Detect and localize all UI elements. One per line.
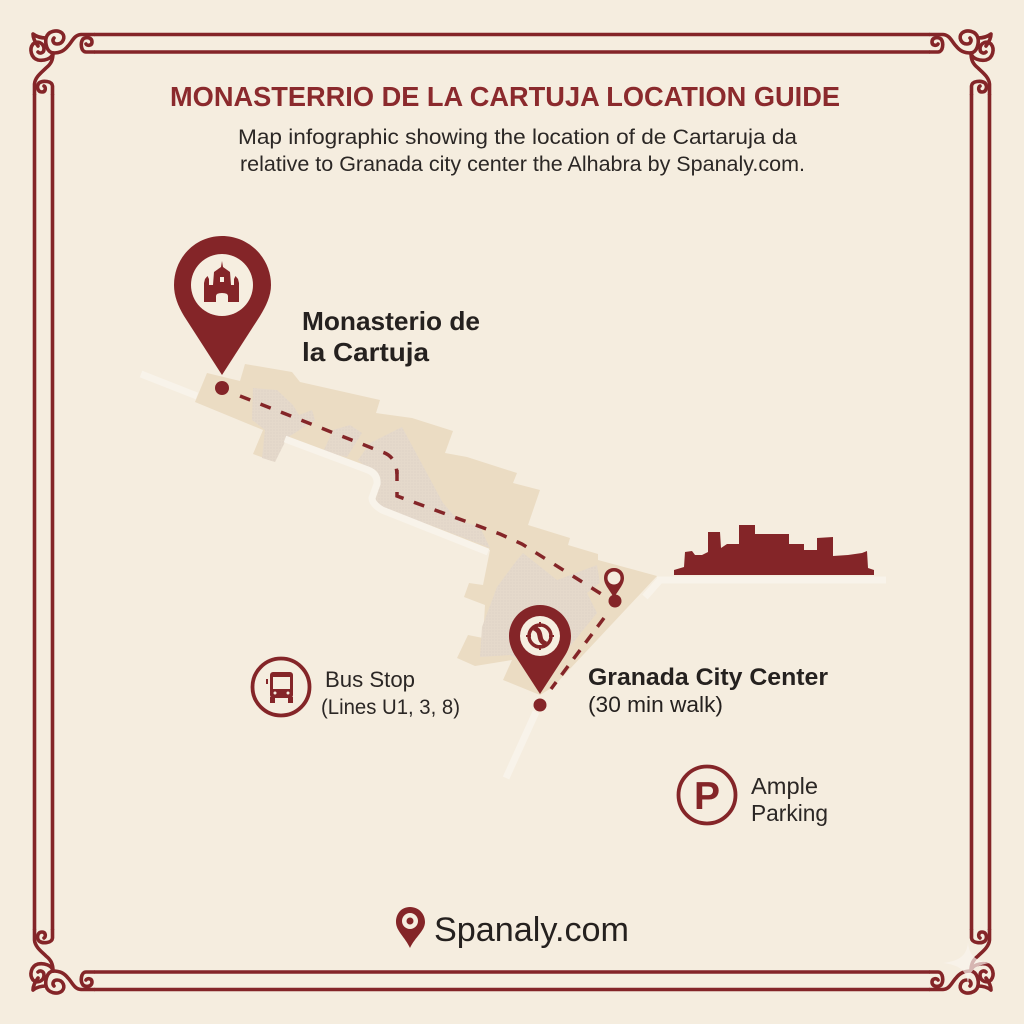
label: monastery: la Cartuja xyxy=(302,337,430,367)
icon: bus xyxy=(266,672,293,703)
bus stop: (Lines U1, 3, 8) xyxy=(321,696,460,719)
skyline xyxy=(674,525,874,575)
walking route xyxy=(240,396,606,689)
footer brand: Spanaly.com xyxy=(434,911,629,949)
parking: Parking xyxy=(751,800,828,826)
subtitle xyxy=(238,126,805,176)
label: city center: Granada City Center xyxy=(588,664,828,691)
pin: monastery xyxy=(174,236,271,395)
district shape xyxy=(195,364,657,695)
label: monastery: Monasterio de xyxy=(302,306,480,336)
bus stop: Bus Stop xyxy=(325,667,415,692)
subtitle: Map infographic showing the location of de Cartaruja da xyxy=(238,126,797,149)
icon: parking P: P xyxy=(694,775,720,818)
label: monastery xyxy=(302,306,480,367)
roads xyxy=(141,374,886,778)
title: MONASTERRIO DE LA CARTUJA LOCATION GUIDE xyxy=(170,81,840,112)
pin: city center xyxy=(509,605,571,712)
icon: monastery building xyxy=(204,261,239,302)
hatched zones xyxy=(252,388,600,672)
parking: Ample xyxy=(751,773,818,799)
label: city center xyxy=(588,664,828,717)
icon: compass xyxy=(526,622,554,650)
subtitle: relative to Granada city center the Alhabra by Spanaly.com. xyxy=(240,153,805,176)
map xyxy=(141,364,886,778)
bus stop xyxy=(252,658,460,719)
small pin xyxy=(604,568,624,608)
parking xyxy=(678,766,828,826)
label: city center: (30 min walk) xyxy=(588,692,723,717)
